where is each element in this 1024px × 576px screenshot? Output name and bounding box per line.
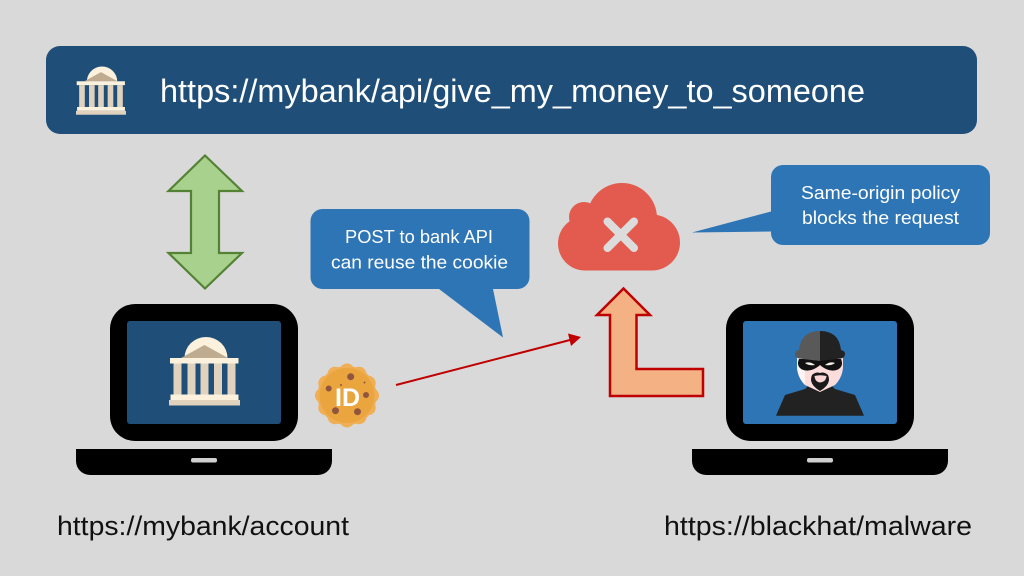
laptop: blackhat malware bbox=[692, 304, 948, 475]
callout: POST can reuse cookie: POST to bank API bbox=[345, 226, 493, 247]
URL text: https://mybank/api/give_my_money_to_someone bbox=[160, 73, 865, 109]
callout: POST can reuse cookie: can reuse the cookie bbox=[331, 252, 508, 272]
header bar: bank API URL bbox=[46, 46, 977, 134]
callout: same-origin policy: Same-origin policy bbox=[801, 182, 961, 203]
icon: bank building small bbox=[76, 66, 126, 115]
icon: hacker bbox=[776, 331, 864, 416]
label: malware URL: https://blackhat/malware bbox=[664, 511, 972, 541]
laptop: bank account bbox=[76, 304, 332, 475]
callout: same-origin policy: blocks the request bbox=[802, 207, 959, 228]
arrow: green double-headed arrow bbox=[168, 156, 242, 288]
callout: POST can reuse cookie bbox=[310, 209, 530, 338]
icon: bank building large bbox=[169, 337, 240, 406]
icon: ID cookie: ID bbox=[335, 384, 360, 412]
label: bank account URL: https://mybank/account bbox=[57, 511, 350, 541]
arrow: red request line from cookie bbox=[396, 334, 581, 385]
icon: blocked cloud bbox=[558, 183, 680, 270]
callout: same-origin policy bbox=[692, 165, 990, 245]
icon: ID cookie bbox=[315, 364, 379, 428]
arrow: orange bent arrow bbox=[597, 288, 703, 396]
